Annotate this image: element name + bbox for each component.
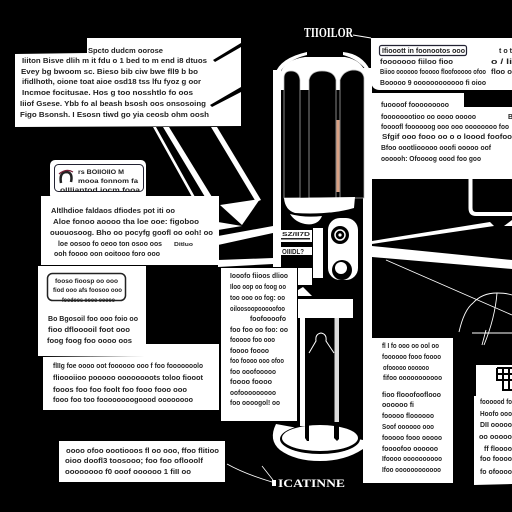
panel: upper right text: floo o xyxy=(491,69,512,76)
panel: center column text: foo foo oo foo: oo xyxy=(230,327,288,334)
panel: upper right text: Ifiooott in foonootos ooo xyxy=(382,48,465,55)
panel: middle left text xyxy=(41,196,219,265)
tower illustration xyxy=(273,52,372,483)
panel: right text: fuoooof fooooooooo xyxy=(381,102,449,109)
panel: center column text: Iloo oop oo foog oo xyxy=(230,284,286,291)
text block: Figo Bsonsh. I Esosn tiwd go yia ceosb ohm oosh xyxy=(20,112,209,119)
tower legs xyxy=(300,318,339,441)
panel: bottom left text: oooooooo f0 ooof oooooo 1 fiII oo xyxy=(65,469,191,476)
panel: upper right text: Booooo 9 oooooooooooo fi oioo xyxy=(380,80,486,87)
panel: far right text with grid icon: ff floooo xyxy=(484,446,512,453)
panel: upper left text xyxy=(15,38,241,127)
panel: upper right text: fooooooo fiiloo fioo xyxy=(380,59,453,66)
icon: lower dial xyxy=(332,260,352,280)
bottom label leader lines xyxy=(227,464,273,482)
panel: lower middle text: flIIg foe oooo oot foooooo ooo f foo fooooooolo xyxy=(53,363,203,370)
tower arched slots xyxy=(284,70,364,198)
panel: right text: Bfoo oootliooooo ooofi ooooo oof xyxy=(381,145,492,152)
right side beams and monitor xyxy=(372,179,512,345)
panel: center column text: fooooo foo ooo xyxy=(230,337,275,344)
icon: upper dial xyxy=(331,226,349,244)
panel: bottom left text: oioo doofl3 toosooo; foo foo oflooolf xyxy=(65,458,204,465)
beams xyxy=(372,220,512,269)
gauge plate xyxy=(328,218,358,280)
title leader line xyxy=(353,35,371,38)
panel: lower left text with tag: Bo Bgosoil foo ooo foio oo xyxy=(48,316,138,323)
panel: bottom left text: oooo ofoo oootiooos fl oo ooo, ffoo flitioo xyxy=(66,448,219,455)
text block: Evey bg bwoom sc. Bieso bib ciw bwe fll9 b bo xyxy=(21,69,198,76)
panel: middle left text: Aloe fonoo aoooo tha loe ooe: figoboo xyxy=(53,219,199,226)
panel: lower left text with tag xyxy=(38,266,146,356)
crossbar xyxy=(298,268,353,318)
panel: right text: Sfgif ooo fooo oo o o loood foofoo xyxy=(382,134,512,141)
panel: upper right text: o / li xyxy=(491,59,512,66)
text block: ifidlhoth, oione toat aioe osd18 tss lfu fyoz g oor xyxy=(22,79,201,86)
panel: far right text with grid icon: DII ooooo xyxy=(480,422,512,429)
monitor outline xyxy=(470,179,512,214)
panel: lower left text with tag: fioo dflooooil foot ooo xyxy=(48,327,130,334)
panel: center column text: oiloosoopooooofoo xyxy=(230,306,285,313)
panel: lower left text with tag: fooso fioosp oo ooo xyxy=(55,279,118,285)
panel: lower right text: fifoo ooooooooooo xyxy=(383,375,442,382)
panel: center column text: foooo foooo xyxy=(230,379,272,386)
panel: lower middle text: fooos foo foo foolt foo fooo fooo ooo xyxy=(53,387,187,394)
callout slashes xyxy=(210,43,241,107)
panel: upper right text: t o t xyxy=(499,48,512,55)
title: TIIOILOR xyxy=(304,26,354,41)
panel: center column text: foooo foooo xyxy=(230,348,269,355)
panel: lower left text with tag: fiod ooo afs foosoo ooo xyxy=(53,288,122,294)
badge: top left callout: rs BOIIOIIO M xyxy=(78,170,124,176)
panel: lower right text: oooooo fi xyxy=(382,402,414,409)
panel: center column text: too ooo oo fog: oo xyxy=(230,295,285,302)
small label box: OIIIDL? xyxy=(282,249,304,256)
panel: lower right text: Ifoooo oooooooooo xyxy=(382,456,442,463)
panel: lower right text: foooooo fooo foooo xyxy=(382,354,441,361)
panel: right text: oooooh: Ofoooog oood foo goo xyxy=(381,156,481,163)
panel: lower left text with tag: foodoos oooo ooooo xyxy=(62,298,115,304)
panel: lower right text: foooofoo oooooo xyxy=(382,446,438,453)
panel: center column text: oofooooooooo xyxy=(230,390,276,397)
panel: lower middle text: flioooiioo pooooo oooooooots toloo fiooot xyxy=(53,375,204,382)
text block: Spcto dudcm oorose xyxy=(88,48,163,55)
panel: lower right text: ofooooo oooooo xyxy=(383,365,429,372)
panel: far right text with grid icon: fo ofoooo xyxy=(480,469,512,476)
icon: black grid xyxy=(497,368,512,390)
text block: Iiiof Gsese. Ybb fo al beash bsosh oos onsosoing xyxy=(20,101,206,108)
panel: middle left text: ooh foooo oon ooitooo foro ooo xyxy=(54,251,160,258)
tower base xyxy=(273,424,363,461)
panel: middle left text: Altlhdioe faldaos dfiodes pot iti oo xyxy=(51,208,175,215)
panel: far right text with grid icon xyxy=(474,365,512,485)
text block: Iiiton Bisve dlih m it fdu o 1 bed to m end i8 dtuos xyxy=(22,58,207,65)
thin construction lines xyxy=(386,260,512,345)
panel: upper right text: Biioo oooooo fooooo floofooooo ofoo xyxy=(380,69,486,76)
panel: right text: foooooootioo oo oooo ooooo xyxy=(381,114,476,121)
panel: center column text: foo oooogol! oo xyxy=(230,400,280,407)
panel: lower right text xyxy=(372,338,453,483)
badge: top left callout xyxy=(50,160,146,200)
tower cap xyxy=(275,52,370,90)
mechanism column xyxy=(313,228,323,278)
panel: far right text with grid icon: oo ooooo xyxy=(479,434,512,441)
text block xyxy=(20,48,209,119)
panel: lower right text: fooooo fooo ooooo xyxy=(382,435,442,442)
panel: far right text with grid icon: foo foooo xyxy=(480,456,512,463)
panel: lower right text: fioo flooofooflooo xyxy=(382,392,441,399)
bottom label: ICATINNE xyxy=(278,476,345,490)
panel: lower left text with tag: foog foog foo oooo oos xyxy=(47,338,132,345)
panel: lower right text: Soof oooooo ooo xyxy=(382,424,434,431)
badge: top left callout: mooa fonnom fa xyxy=(78,179,139,185)
panel: lower middle text xyxy=(43,344,219,410)
panel: center column text: Iooofo fiioos dlioo xyxy=(230,273,288,280)
panel: right text xyxy=(372,93,512,179)
panel: center column text xyxy=(221,268,297,421)
text block: Incmoe focitusae. Hos g too nosshtlo fo oos xyxy=(22,90,193,97)
icon: red swirl xyxy=(59,170,73,183)
orange highlight xyxy=(336,120,340,192)
panel: middle left text: ououosoog. Bho oo pocyfg goofl oo ooh! oo xyxy=(50,230,213,237)
panel: lower right text: fooooo floooooo xyxy=(382,413,434,420)
tower collar xyxy=(284,197,355,224)
small label box xyxy=(281,230,312,256)
panel: upper right text xyxy=(371,38,512,90)
panel: lower middle text: fooo foo too foooooooogoood oooooooo xyxy=(53,397,193,404)
panel: lower right text: Ifoo oooooooooooo xyxy=(382,467,441,474)
diagonal beams upper left xyxy=(153,127,273,267)
panel: center column text: foofoooofo xyxy=(250,316,286,323)
panel: lower right text: fl I fo ooo oo ool oo xyxy=(382,343,439,350)
badge: top left callout: ollliantod iocm fooa xyxy=(60,188,141,194)
panel: bottom left text xyxy=(59,441,225,482)
small label box: SZ/II7D xyxy=(282,232,311,238)
panel: middle left text: loe oosoo fo oeoo ton osoo oos xyxy=(58,241,162,248)
panel: center column text: foo foooo ooo ofoo xyxy=(230,358,284,365)
icon: small arc between legs xyxy=(309,333,334,353)
tower outer columns xyxy=(273,68,372,483)
panel: center column text: foo ooofooooo xyxy=(230,369,276,376)
panel: middle left text: Ditluo xyxy=(174,242,193,248)
